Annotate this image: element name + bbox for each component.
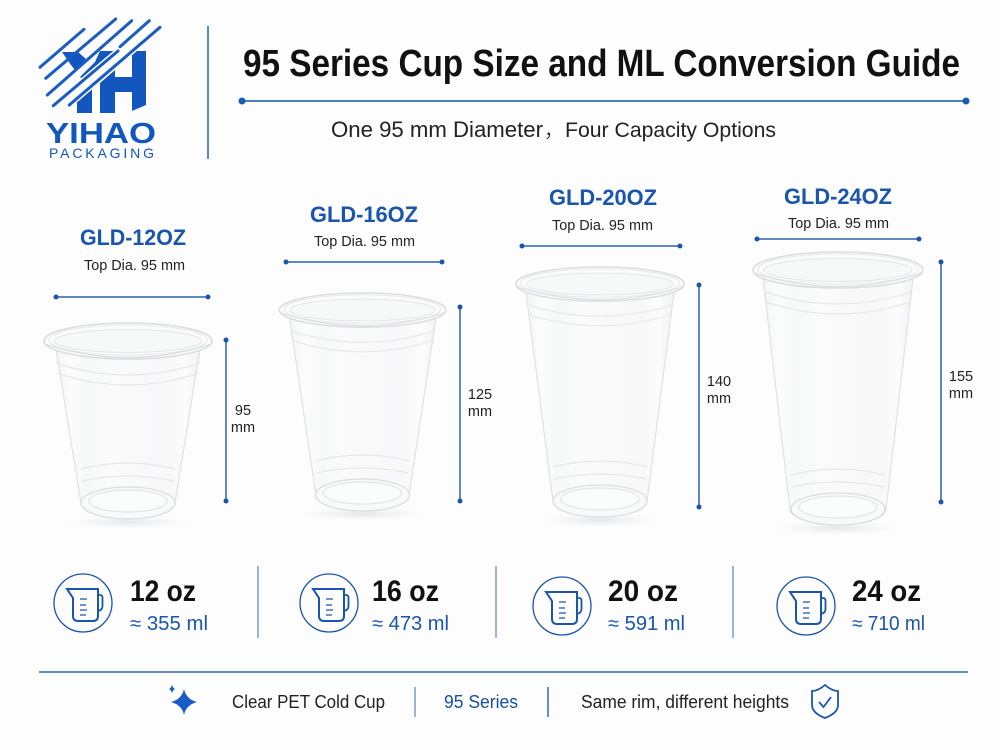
model name: GLD-16OZ — [310, 202, 418, 227]
height label: mm — [707, 391, 731, 407]
model name: GLD-24OZ — [784, 184, 892, 209]
icon: shield check — [812, 685, 838, 718]
height dimension line — [696, 282, 702, 510]
height dimension line — [224, 338, 228, 504]
footer divider — [547, 687, 549, 717]
millilitres: ≈ 473 ml — [372, 613, 449, 635]
logo: Yihao Packaging — [40, 19, 160, 161]
subtitle: Four Capacity Options — [565, 119, 776, 142]
cup illustration 24 oz — [753, 252, 923, 535]
subtitle: One 95 mm Diameter — [331, 117, 543, 142]
model name: GLD-12OZ — [80, 225, 186, 250]
height label: 155 — [949, 369, 973, 385]
icon: measuring cup — [777, 577, 835, 635]
logo wordmark: YIHAO — [46, 118, 156, 150]
top diameter label: Top Dia. 95 mm — [84, 257, 185, 274]
subtitle — [331, 117, 776, 142]
ounces: 20 oz — [608, 575, 678, 608]
model name: GLD-20OZ — [549, 185, 657, 210]
capacity: 12 oz — [54, 574, 208, 635]
height dimension line — [938, 260, 944, 504]
ounces: 24 oz — [852, 575, 921, 608]
height label: mm — [949, 386, 973, 402]
icon: measuring cup — [300, 574, 358, 632]
top diameter label: Top Dia. 95 mm — [552, 217, 653, 234]
icon: sparkle — [169, 685, 197, 715]
capacity divider — [257, 566, 259, 638]
subtitle: ， — [544, 119, 565, 142]
footer divider — [414, 687, 416, 717]
capacity: 24 oz — [777, 575, 925, 635]
column: GLD-24OZ — [753, 184, 973, 535]
capacity divider — [495, 566, 497, 638]
footer text: rim note: Same rim, different heights — [581, 692, 789, 712]
height dimension line — [458, 304, 462, 504]
footer text: series: 95 Series — [444, 692, 518, 712]
top diameter dimension line — [754, 236, 922, 242]
title underline — [238, 98, 970, 104]
capacity: 16 oz — [300, 574, 449, 635]
cup illustration 16 oz — [279, 293, 446, 521]
height label: 125 — [468, 387, 492, 403]
top diameter dimension line — [284, 260, 444, 264]
millilitres: ≈ 710 ml — [852, 613, 925, 635]
ounces: 12 oz — [130, 575, 196, 608]
column: GLD-12OZ — [44, 225, 255, 529]
footer text: material: Clear PET Cold Cup — [232, 692, 385, 712]
header divider — [207, 26, 209, 159]
footer rule — [39, 671, 968, 673]
capacity divider — [732, 566, 734, 638]
logo mark — [40, 19, 160, 113]
cup illustration 20 oz — [516, 267, 684, 527]
logo tagline: PACKAGING — [49, 145, 154, 161]
top diameter label: Top Dia. 95 mm — [314, 233, 415, 250]
top diameter dimension line — [520, 244, 682, 248]
height label: mm — [231, 420, 255, 436]
top diameter dimension line — [54, 294, 210, 300]
ounces: 16 oz — [372, 575, 439, 608]
column: GLD-16OZ — [279, 202, 492, 521]
top diameter label: Top Dia. 95 mm — [788, 215, 889, 232]
height label: mm — [468, 404, 492, 420]
millilitres: ≈ 355 ml — [130, 613, 208, 635]
icon: measuring cup — [533, 577, 591, 635]
icon: measuring cup — [54, 574, 112, 632]
column: GLD-20OZ — [516, 185, 731, 527]
cup illustration 12 oz — [44, 323, 212, 529]
millilitres: ≈ 591 ml — [608, 613, 685, 635]
capacity: 20 oz — [533, 575, 685, 635]
height label: 95 — [235, 403, 251, 419]
height label: 140 — [707, 374, 731, 390]
